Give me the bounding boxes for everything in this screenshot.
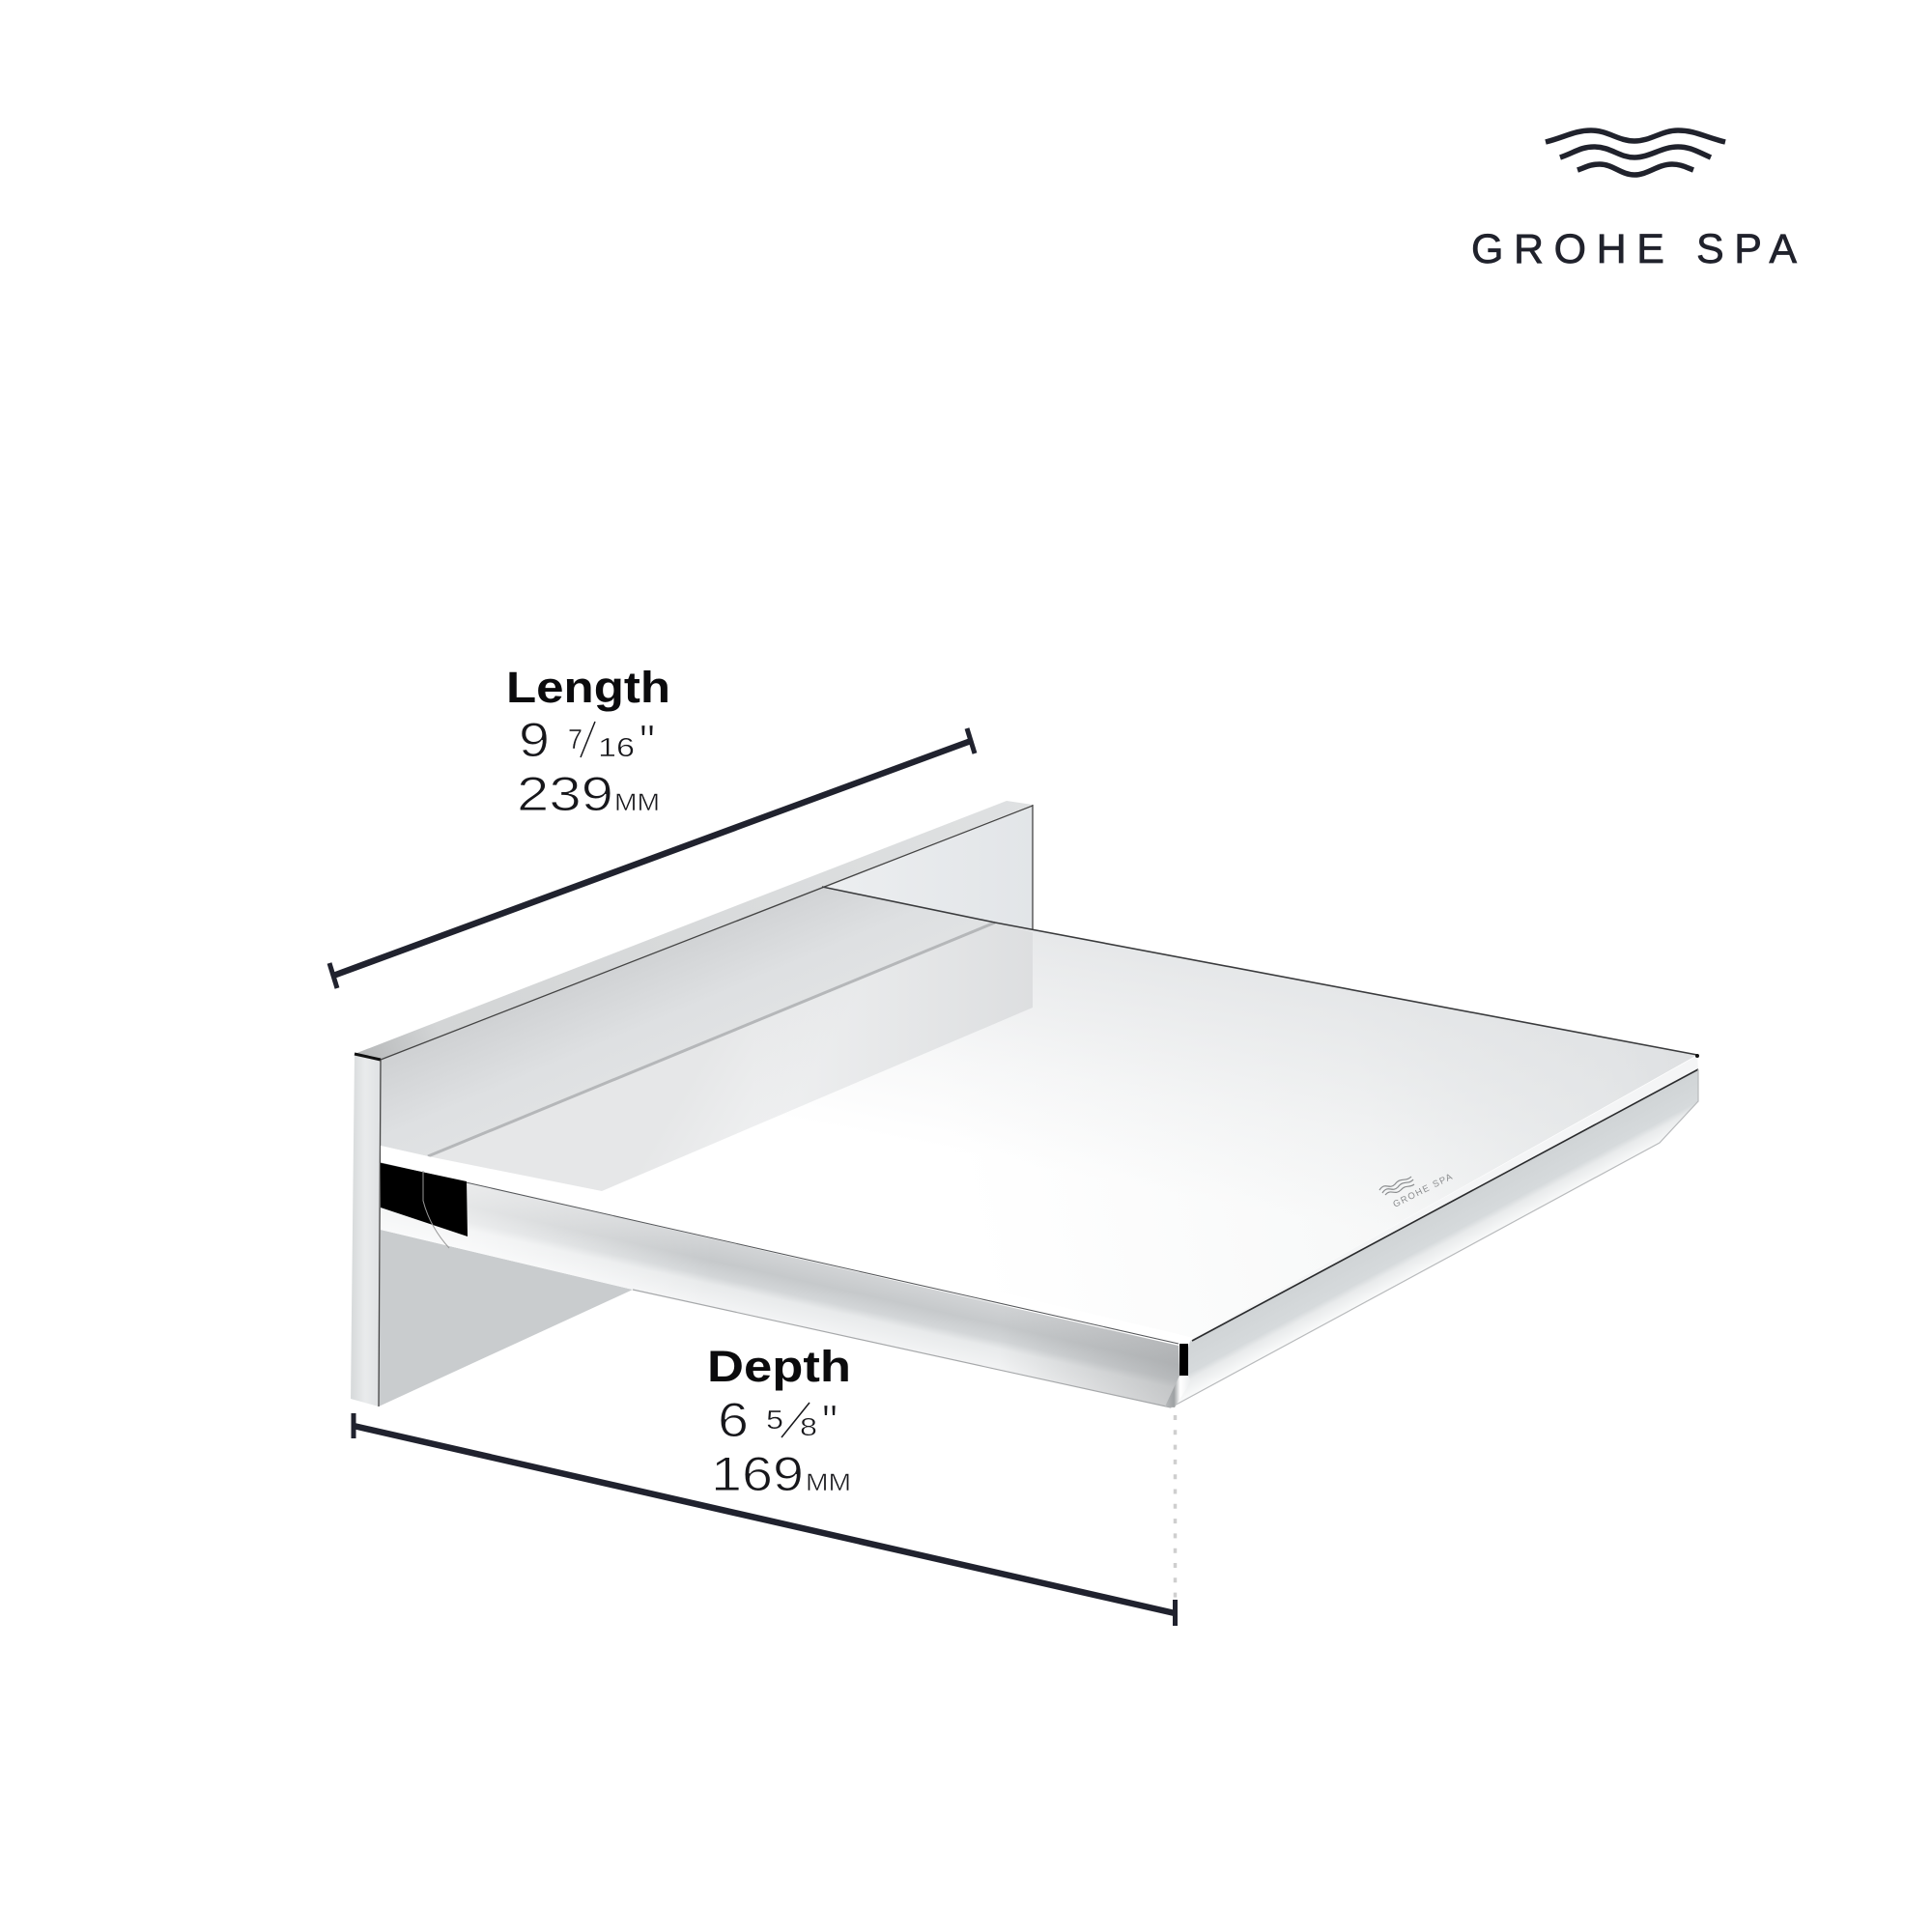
- shelf white front rim: [381, 1146, 1194, 1344]
- length millimetres value: 239: [517, 767, 613, 821]
- shelf shadow darkening: [428, 923, 1033, 1191]
- length inches value: 9: [519, 713, 550, 767]
- small engraved wordmark: GROHE SPA: [1391, 1171, 1456, 1210]
- depth inches value: 8: [800, 1412, 817, 1441]
- length dimension bar: [329, 728, 975, 988]
- depth inches value: 5: [766, 1405, 783, 1435]
- length millimetres value: MM: [614, 789, 660, 816]
- length heading: Length: [506, 663, 670, 712]
- depth millimetres value: [711, 1447, 851, 1501]
- shelf glass top surface: [428, 923, 1697, 1343]
- icon: three waves: [1546, 130, 1725, 175]
- depth inches value: 6: [718, 1393, 749, 1447]
- logo: GROHE SPA: [1471, 130, 1797, 272]
- corner tip: [1165, 1376, 1191, 1407]
- wall plate lower inner face: [379, 1230, 633, 1406]
- shelf right rim highlight: [1190, 1056, 1698, 1342]
- wall plate front edge: [351, 1054, 381, 1406]
- shelf back edge: [822, 887, 1697, 1055]
- corner dot: [1695, 1054, 1699, 1058]
- logo wordmark: GROHE SPA: [1471, 226, 1797, 272]
- depth millimetres value: MM: [806, 1469, 851, 1496]
- shelf underside line: [633, 1290, 1171, 1407]
- length inches value: ": [639, 715, 655, 769]
- shelf glass left seam: [428, 923, 995, 1156]
- plate edge lines: [355, 1054, 381, 1060]
- depth dimension bar: [354, 1413, 1175, 1626]
- reflection curve: [423, 1171, 449, 1248]
- shelf left face: [381, 1163, 1179, 1407]
- length millimetres value: [517, 767, 660, 821]
- length label: [506, 663, 670, 821]
- length inches value: [519, 713, 655, 769]
- shelf left face tone: [381, 1163, 1179, 1407]
- product: wall-mounted shelf spout: [351, 801, 1699, 1407]
- length inches value: 16: [598, 732, 635, 762]
- wall plate inner upper face: [381, 888, 995, 1156]
- dotted guide line: [1174, 1415, 1177, 1599]
- small engraved logo: [1379, 1177, 1414, 1195]
- wall plate top face: [355, 801, 1033, 1060]
- depth heading: Depth: [707, 1342, 851, 1391]
- shelf right bottom line: [1171, 1069, 1698, 1407]
- shelf wall shadow on glass: [428, 923, 1033, 1191]
- depth inches value: ": [822, 1395, 838, 1449]
- depth inches value: [718, 1393, 838, 1449]
- black reflection block: [381, 1163, 468, 1236]
- shelf glass back shading: [428, 923, 1697, 1343]
- shelf right face: [1171, 1069, 1698, 1407]
- length inches value: 7: [568, 724, 582, 755]
- wall plate visible right side: [822, 807, 1033, 932]
- depth label: [707, 1342, 851, 1501]
- depth millimetres value: 169: [711, 1447, 804, 1501]
- black corner strip: [1179, 1344, 1188, 1376]
